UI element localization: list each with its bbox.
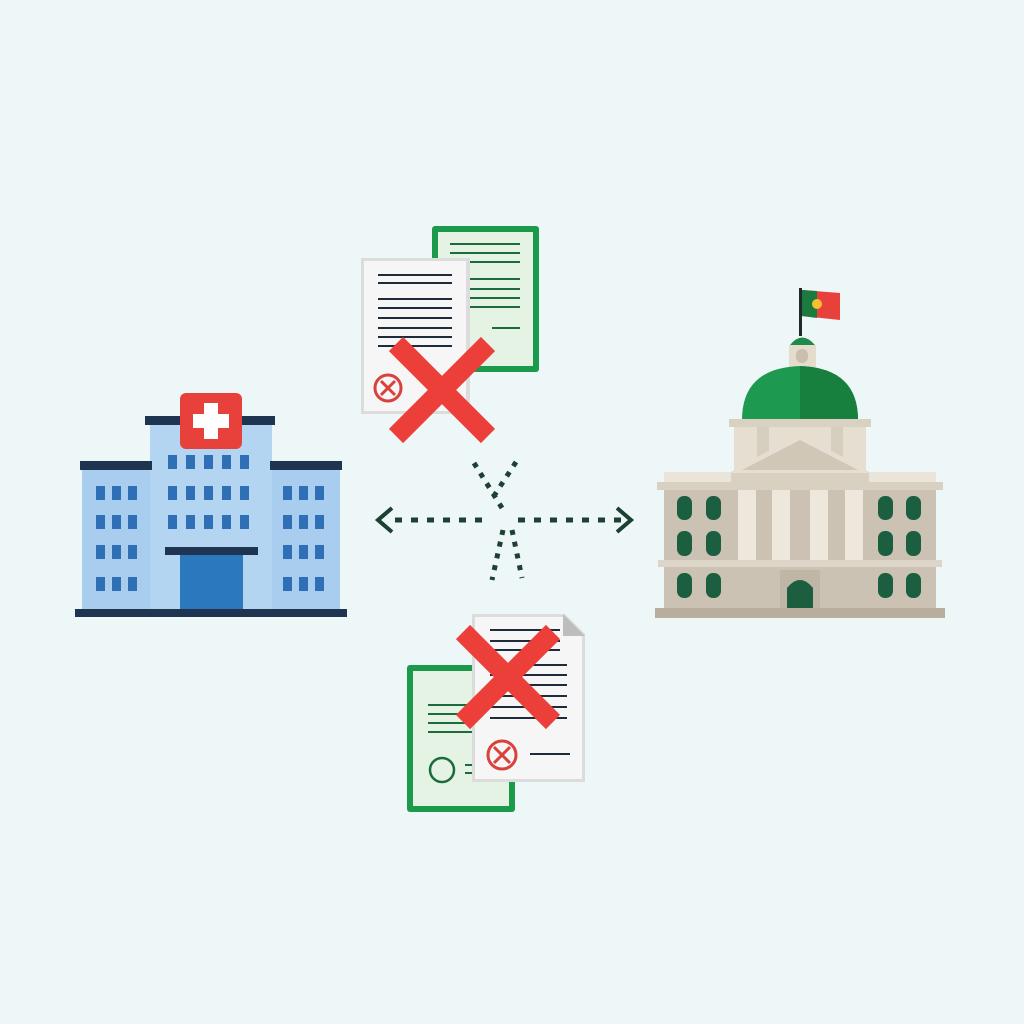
icon: red cross sign: [180, 393, 242, 449]
icon: hospital building: [75, 393, 347, 617]
arrow: broken two-way dotted arrow: [378, 462, 631, 580]
icon: rejected documents top: [361, 226, 539, 436]
icon: rejected documents bottom: [407, 614, 585, 812]
icon: government building: [655, 288, 945, 618]
icon: red X bottom: [463, 632, 553, 722]
icon: portuguese flag: [802, 290, 840, 320]
icon: red X top: [396, 344, 488, 436]
